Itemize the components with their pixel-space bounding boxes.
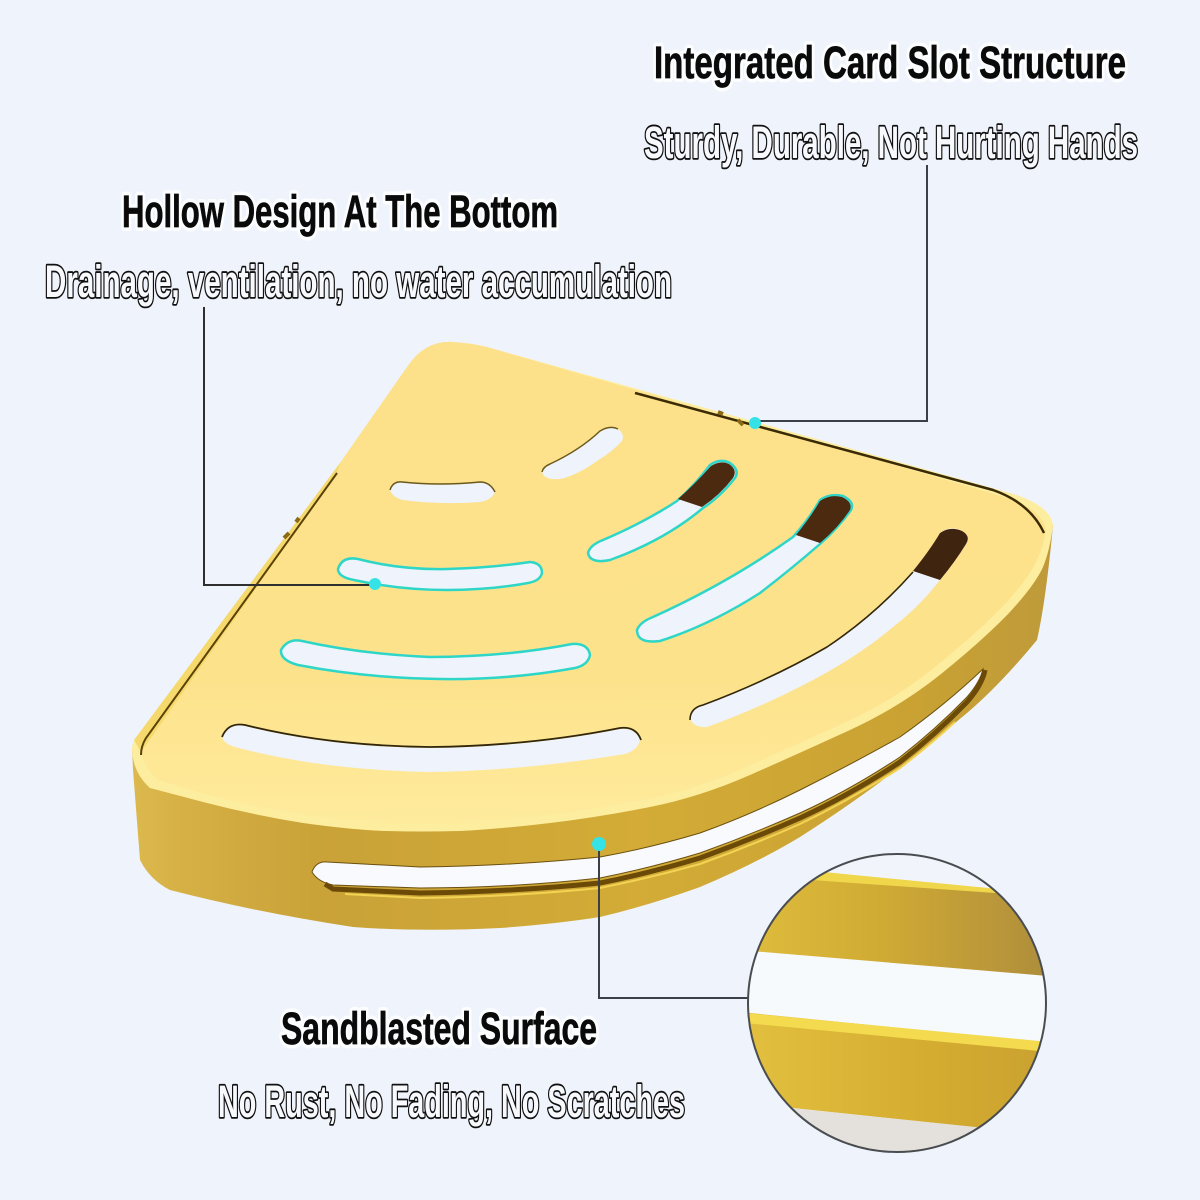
heading: sandblasted: Sandblasted Surface xyxy=(281,1003,597,1054)
shelf top surface xyxy=(132,342,1053,832)
drainage slots xyxy=(222,427,968,772)
heading: sandblasted: Sandblasted Surface xyxy=(281,1003,597,1054)
lower gold band xyxy=(749,1012,1037,1128)
heading: hollow design: Hollow Design At The Bottom xyxy=(122,186,558,237)
slot inner shadow lip xyxy=(325,670,985,893)
slot G dark tip xyxy=(796,496,851,543)
slot E xyxy=(542,427,623,479)
card slot groove: right edge xyxy=(635,393,1044,533)
marker dot: card slot xyxy=(749,417,761,429)
slot F dark tip xyxy=(678,462,735,507)
slot F xyxy=(588,461,737,561)
side drainage slot xyxy=(312,669,983,888)
leader line: hollow design xyxy=(204,307,375,585)
slot B xyxy=(281,640,590,679)
magnified surface lens xyxy=(747,853,1047,1153)
corner shelf product xyxy=(132,342,1053,930)
card slot groove: left edge xyxy=(141,473,337,755)
marker dot: hollow design xyxy=(369,578,381,590)
subtext: drainage: Drainage, ventilation, no water accumulation xyxy=(45,256,672,307)
left rim strip xyxy=(134,463,340,752)
marker dot: sandblasted xyxy=(592,837,606,851)
leader line: card slot xyxy=(755,165,927,421)
upper gold band xyxy=(758,880,1042,976)
leader line: sandblasted xyxy=(599,845,749,998)
shelf top inner panel xyxy=(141,342,1046,824)
white gap xyxy=(758,952,1043,977)
slot H dark tip xyxy=(913,529,968,580)
slot H xyxy=(690,528,968,727)
slot clips xyxy=(284,412,743,538)
slot bright lip xyxy=(345,722,955,898)
heading: hollow design: Hollow Design At The Bottom xyxy=(122,186,558,237)
heading: hollow design xyxy=(122,186,558,237)
slot D xyxy=(390,482,495,503)
slot G xyxy=(637,495,852,642)
slot C xyxy=(338,558,542,590)
slot A xyxy=(222,725,640,772)
subtext: no rust: No Rust, No Fading, No Scratches xyxy=(218,1076,685,1127)
silver reflection xyxy=(794,1108,978,1151)
shelf side wall xyxy=(132,525,1053,930)
